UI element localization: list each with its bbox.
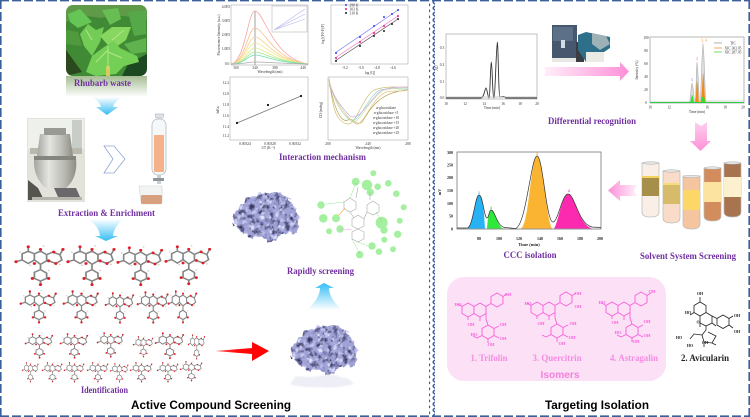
chart: CCC isolation chromatogram: 4 xyxy=(490,206,492,210)
chart: CCC isolation chromatogram: 160 xyxy=(557,236,563,241)
caption: rapidly screening: Rapidly screening xyxy=(287,266,354,276)
chart: extracted ion chromatogram: 0 xyxy=(645,101,647,105)
chart: fluorescence spectra: 380 xyxy=(272,66,278,70)
chart: extracted ion chromatogram: 10 xyxy=(648,106,652,110)
structure: astragalin: HO xyxy=(614,330,622,335)
structure: avicularin: HO xyxy=(685,310,691,315)
chart: van't Hoff plot xyxy=(216,77,308,150)
panel: active compound screening xyxy=(14,4,411,412)
chart: CCC isolation chromatogram: 200 xyxy=(447,175,453,180)
caption: differential recognition: Differential recognition xyxy=(548,116,636,126)
chart: fluorescence spectra xyxy=(217,5,308,74)
chart: double log plot: 303 K xyxy=(350,8,359,12)
chart: CCC isolation chromatogram: 180 xyxy=(577,236,583,241)
heading: active compound screening: Active Compound Screening xyxy=(131,398,291,412)
chart: van't Hoff plot: 11.2 xyxy=(223,134,229,138)
photo: extraction reactor xyxy=(27,118,85,202)
structure: avicularin: O xyxy=(696,320,700,324)
structure: avicularin: OH xyxy=(702,340,709,345)
caption: avicularin: 2. Avicularin xyxy=(681,353,729,363)
chart: extracted ion chromatogram: 16 xyxy=(705,106,709,110)
structure: astragalin xyxy=(598,289,656,344)
chart: circular dichroism: α-glucosidase xyxy=(376,106,396,110)
caption: identification: Identification xyxy=(81,385,128,395)
chart: CCC isolation chromatogram: 300 xyxy=(447,150,453,155)
chart: circular dichroism: Wavelength (nm) xyxy=(356,146,381,150)
chart: circular dichroism: CD (mdeg) xyxy=(319,101,323,118)
chart: circular dichroism: α-glucosidase +20 xyxy=(373,126,399,130)
arrow: up to rapid screening xyxy=(307,283,342,310)
chart: base peak chromatogram: Time (min) xyxy=(484,106,501,110)
photo: rhubarb waste xyxy=(66,5,147,97)
arrow: pink left xyxy=(608,180,637,201)
solvent system tubes xyxy=(642,162,741,229)
chart: CCC isolation chromatogram: 250 xyxy=(447,162,453,168)
chart: van't Hoff plot: 1/T (K⁻¹) xyxy=(261,146,276,150)
panel divider xyxy=(429,0,435,417)
icon: chromatography column and beaker xyxy=(139,114,166,204)
chart: van't Hoff plot: 12.2 xyxy=(223,81,229,85)
chart: extracted ion chromatogram: 18 xyxy=(723,106,727,110)
structure: avicularin: HO xyxy=(687,343,693,348)
chart: base peak chromatogram: 0.0 xyxy=(440,96,444,100)
chart: extracted ion chromatogram: Intensity (%) xyxy=(635,60,639,79)
structure: trifolin: HO xyxy=(470,332,478,337)
panel: targeting isolation xyxy=(435,25,745,412)
chart: double log plot: log [Q] xyxy=(365,71,375,75)
chart: extracted ion chromatogram: XIC 303.05 xyxy=(725,46,742,50)
chart: fluorescence spectra: Fluorescence Intensity (a.u.) xyxy=(217,14,221,55)
chart: CCC isolation chromatogram: mV xyxy=(437,189,442,195)
chart: base peak chromatogram: 10 xyxy=(444,102,448,106)
chart: fluorescence spectra: 440 xyxy=(300,66,306,70)
arrow: pink right xyxy=(543,62,629,81)
chart: circular dichroism: α-glucosidase +25 xyxy=(373,131,399,135)
structure: trifolin: OH xyxy=(504,292,512,297)
chart: fluorescence spectra: 0.0 xyxy=(225,62,229,66)
chart: CCC isolation chromatogram: 150 xyxy=(447,188,453,193)
structure: quercitrin: HO xyxy=(524,301,532,306)
photo: mass spectrometer instrument xyxy=(552,25,610,62)
structure: trifolin: OH xyxy=(487,342,495,347)
chart: extracted ion chromatogram: Time (min) xyxy=(689,110,706,114)
structure: trifolin: OH xyxy=(467,322,475,327)
heading: isomers: Isomers xyxy=(540,370,580,381)
chevron arrow xyxy=(104,146,125,173)
chart: CCC isolation chromatogram: 100 xyxy=(496,236,502,241)
chart: fluorescence spectra: 340 xyxy=(252,66,258,70)
structure: avicularin: OH xyxy=(734,313,741,318)
chart: CCC isolation chromatogram: 140 xyxy=(537,236,543,241)
chart: van't Hoff plot: 0.00324 xyxy=(239,142,251,146)
chart: double log plot: -4.8 xyxy=(374,66,380,70)
chart: base peak chromatogram: 20 xyxy=(535,102,539,106)
structure: quercitrin: OH xyxy=(568,335,576,340)
chart: CCC isolation chromatogram: 200 xyxy=(597,236,603,241)
chart: base peak chromatogram: 14 xyxy=(482,102,486,106)
chart: double log plot: -4.6 xyxy=(390,66,396,70)
chart: extracted ion chromatogram: TIC xyxy=(730,42,736,46)
chart: fluorescence spectra: 2.0E5 xyxy=(222,33,230,37)
chart: CCC isolation chromatogram: 120 xyxy=(516,236,522,241)
chart: base peak chromatogram: 0.2 xyxy=(440,63,444,67)
chart: CCC isolation chromatogram xyxy=(437,150,603,247)
structure: quercitrin: OH xyxy=(558,341,566,346)
red arrow xyxy=(215,342,269,361)
chart: circular dichroism: α-glucosidase +15 xyxy=(373,121,399,125)
chart: van't Hoff plot: 11.8 xyxy=(223,103,229,107)
chart: extracted ion chromatogram: 80 xyxy=(644,49,648,53)
caption: trifolin: 1. Trifolin xyxy=(470,353,508,363)
arrow: down to extraction xyxy=(92,97,122,115)
chart: circular dichroism: α-glucosidase +5 xyxy=(374,111,398,115)
structure: astragalin: OH xyxy=(648,289,656,294)
chart: fluorescence spectra: 1.0E5 xyxy=(222,47,230,51)
chart: van't Hoff plot: 11.6 xyxy=(223,114,229,118)
chart: CCC isolation chromatogram: 0 xyxy=(451,226,453,232)
chart: extracted ion chromatogram: 2 xyxy=(696,57,698,61)
caption: CCC isolation: CCC isolation xyxy=(504,250,556,260)
chart: extracted ion chromatogram: 100 xyxy=(643,36,649,40)
chart: circular dichroism: α-glucosidase +10 xyxy=(373,116,399,120)
chart: base peak chromatogram: 0.3 xyxy=(440,46,444,50)
chart: circular dichroism: 280 xyxy=(405,142,411,146)
caption: interaction mechanism: Interaction mechanism xyxy=(279,152,366,162)
structure: trifolin xyxy=(454,292,512,347)
structure: quercitrin xyxy=(524,291,582,346)
chart: CCC isolation chromatogram: 2 xyxy=(568,189,570,193)
chart: circular dichroism: 240 xyxy=(365,142,371,146)
chart: circular dichroism xyxy=(319,77,411,150)
structure: astragalin: OH xyxy=(632,339,640,344)
chart: double log plot: 298 K xyxy=(350,4,359,8)
structure: quercitrin: OH xyxy=(574,304,582,309)
chart: double log plot: log [(F0-F)/F] xyxy=(321,24,325,44)
caption: quercitrin: 3. Quercitrin xyxy=(532,353,582,363)
chart: CCC isolation chromatogram: Time (min) xyxy=(518,242,540,247)
chart: base peak chromatogram: 16 xyxy=(501,102,505,106)
chart: base peak chromatogram: 0.1 xyxy=(440,80,444,84)
chart: extracted ion chromatogram: 3, 4 xyxy=(701,38,707,44)
chart: base peak chromatogram: 18 xyxy=(518,102,522,106)
caption: rhubarb waste: Rhubarb waste xyxy=(74,78,131,88)
chart: double log plot: -5.0 xyxy=(358,66,364,70)
chart: fluorescence spectra: 3.0E5 xyxy=(222,19,230,23)
protein structure: target xyxy=(290,325,356,388)
chart: extracted ion chromatogram: 20 xyxy=(741,106,745,110)
chart: extracted ion chromatogram xyxy=(635,36,745,114)
structure: trifolin: OH xyxy=(499,322,507,327)
chart: double log plot xyxy=(321,4,408,75)
chart: circular dichroism: 200 xyxy=(325,142,331,146)
chart: extracted ion chromatogram: 12 xyxy=(667,106,671,110)
chart: fluorescence spectra: 300 xyxy=(233,66,239,70)
structure: quercitrin: OH xyxy=(574,291,582,296)
chart: fluorescence spectra: 4.0E5 xyxy=(222,5,230,9)
arrow: pink down xyxy=(690,122,711,151)
structure: quercitrin: OH xyxy=(569,321,577,326)
chart: double log plot: -5.2 xyxy=(342,66,348,70)
chart: CCC isolation chromatogram: 3 xyxy=(536,152,538,156)
chart: extracted ion chromatogram: XIC 287.05 xyxy=(725,50,742,54)
chart: extracted ion chromatogram: 20 xyxy=(644,88,648,92)
structure: avicularin: HO xyxy=(676,335,682,340)
chart: fluorescence spectra: Wavelength (nm) xyxy=(258,70,283,74)
chart: van't Hoff plot: 12.0 xyxy=(223,92,229,96)
structure: astragalin: HO xyxy=(598,300,606,305)
structure: astragalin: OH xyxy=(643,333,651,338)
structure: avicularin: OH xyxy=(734,329,741,334)
chart: van't Hoff plot: 11.4 xyxy=(223,125,229,129)
structure: astragalin: OH xyxy=(643,319,651,324)
ligand interaction diagram xyxy=(317,170,407,258)
isomers panel xyxy=(447,277,666,381)
chart: extracted ion chromatogram: 60 xyxy=(644,62,648,66)
chart: base peak chromatogram xyxy=(435,34,539,110)
structure: astragalin: OH xyxy=(611,320,619,325)
caption: astragalin: 4. Astragalin xyxy=(610,353,658,363)
chart: CCC isolation chromatogram: 100 xyxy=(447,201,453,206)
chart: CCC isolation chromatogram: 1 xyxy=(478,191,480,195)
structure: avicularin: OH xyxy=(697,291,704,296)
chart: van't Hoff plot: lnKa xyxy=(216,106,220,114)
chart: van't Hoff plot: 0.00328 xyxy=(264,142,276,146)
chart: extracted ion chromatogram: 1 xyxy=(691,78,693,82)
caption: extraction and enrichment: Extraction & Enrichment xyxy=(58,208,155,218)
chart: double log plot: 310 K xyxy=(350,12,359,16)
chart: base peak chromatogram: AU xyxy=(435,65,439,71)
chart: CCC isolation chromatogram: 50 xyxy=(449,214,453,218)
structure: trifolin: HO xyxy=(454,302,462,307)
molecule structures grid xyxy=(14,245,211,383)
chart: base peak chromatogram: 12 xyxy=(463,102,467,106)
caption: solvent system screening: Solvent System Screening xyxy=(640,251,736,261)
arrow: down to identification xyxy=(88,219,124,241)
structure: quercitrin: OH xyxy=(537,321,545,326)
protein structure: docked complex xyxy=(232,192,298,241)
chart: van't Hoff plot: 0.00332 xyxy=(289,142,301,146)
heading: targeting isolation: Targeting Isolation xyxy=(545,398,649,412)
structure: trifolin: OH xyxy=(499,336,507,341)
structure: avicularin xyxy=(676,291,741,348)
chart: CCC isolation chromatogram: 80 xyxy=(477,236,481,241)
chart: extracted ion chromatogram: 40 xyxy=(644,75,648,79)
